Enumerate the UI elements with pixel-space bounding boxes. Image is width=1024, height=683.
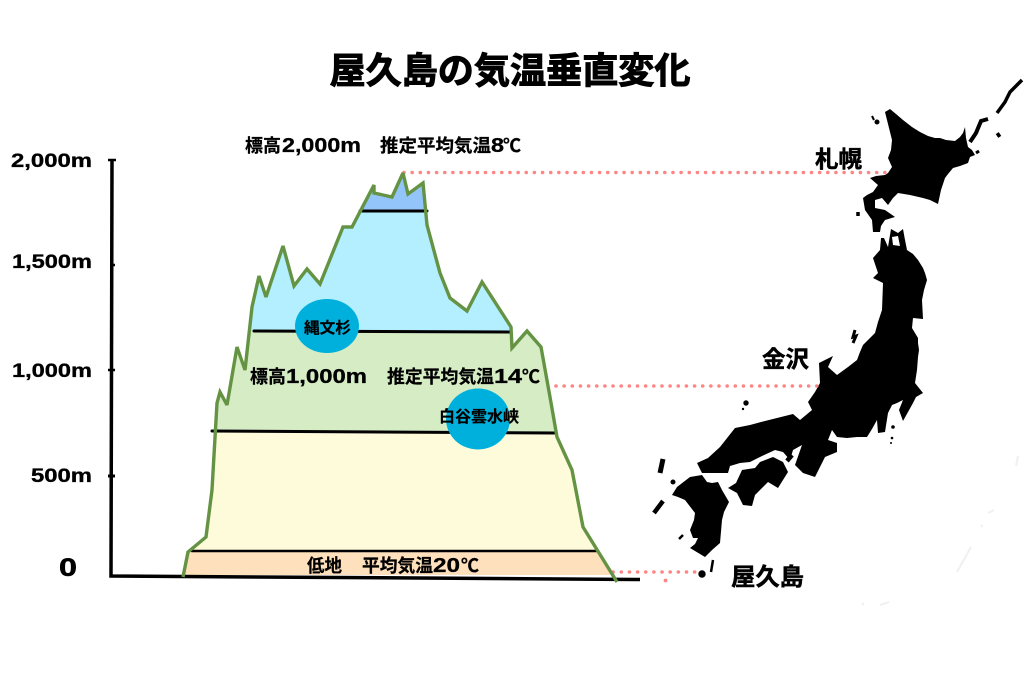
label: 1000m temperature: 標高 [250,367,286,387]
Shikoku [728,457,788,506]
label: 1000m temperature: 14 [494,366,523,388]
label: 2000m temperature: 8 [491,135,504,157]
label: Kanazawa: 金沢 [762,346,809,372]
label: lowland temperature: 平均気温 [362,555,433,576]
badge: Jomon cedar [295,299,359,353]
axis label 1500m: 1,500m [12,251,92,273]
label: 1000m temperature: 推定平均気温 [387,366,494,387]
axis label 500m: 500m [31,465,92,487]
label: 2000m temperature: ℃ [503,136,521,156]
badge: Shiratani Unsuikyo [439,388,519,450]
label: 2000m temperature: 標高 [245,136,281,156]
label: lowland temperature [307,555,479,577]
faint southern islands [862,456,1018,605]
elevation lines [192,211,597,551]
Hokkaido [863,109,975,232]
label: lowland temperature: ℃ [461,556,479,576]
label: 1000m temperature: 1,000m [286,366,367,388]
islands [654,80,1022,578]
axis label 2000m: 2,000m [11,150,92,172]
city labels [731,146,862,591]
dot [664,579,667,582]
axes [108,160,640,580]
axis labels [11,150,92,582]
Kyushu [672,475,729,557]
badge: Shiratani Unsuikyo: 白谷雲水峡 [439,408,519,426]
dotted line: Kanazawa [556,384,820,388]
badge: Jomon cedar: 縄文杉 [304,318,351,337]
label: 1000m temperature: ℃ [522,367,540,387]
label: 2000m temperature [245,135,521,157]
dotted line: Sapporo [404,171,886,174]
dotted line: Yakushima [605,570,696,574]
mountain outline [183,173,617,582]
Honshu [697,229,927,477]
map of Japan [654,80,1022,605]
label: 2000m temperature: 2,000m [282,135,361,157]
label: 2000m temperature: 推定平均気温 [380,135,491,156]
label: lowland temperature: 20 [433,555,460,577]
label: Sapporo: 札幌 [815,146,862,172]
label: 1000m temperature [250,366,540,388]
axis label 0: 0 [59,554,77,582]
Mutsu Bay [892,236,900,246]
axis label 1000m: 1,000m [12,360,92,382]
title: 屋久島の気温垂直変化 [330,50,690,91]
mountain bands [185,178,610,575]
label: lowland temperature: 低地 [307,556,342,576]
label: Yakushima: 屋久島 [731,564,804,591]
